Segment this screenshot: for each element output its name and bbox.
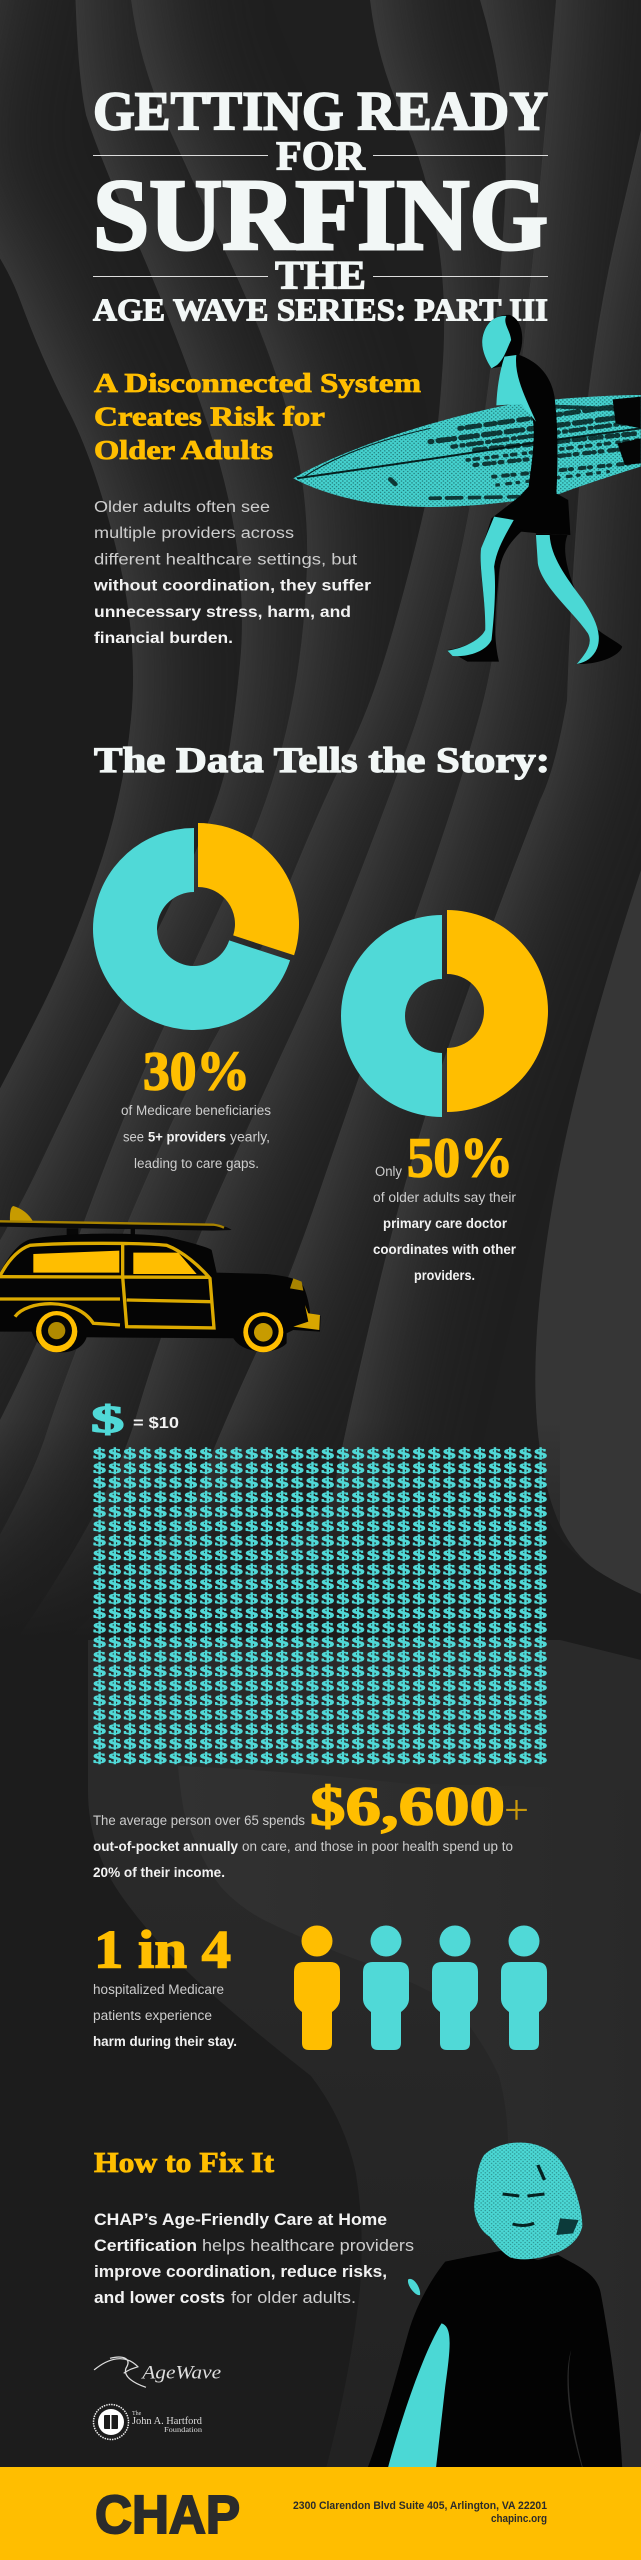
intro paragraph: different healthcare settings, but <box>94 552 358 568</box>
pictogram: 660 dollar signs: $$$$$$$$$$$$$$$$$$$$$$$$$$$$$$ <box>93 1475 549 1491</box>
heading: a disconnected system: A Disconnected System <box>94 368 422 398</box>
person 3 <box>432 1926 478 2050</box>
pictogram: 660 dollar signs: $$$$$$$$$$$$$$$$$$$$$$$$$$$$$$ <box>93 1605 549 1622</box>
stat: only 50 percent of older adults <box>373 1128 517 1283</box>
stat: 6,600 dollars out of pocket: out-of-pocket annually <box>93 1839 238 1854</box>
car body <box>0 1234 321 1352</box>
stat: 6,600 dollars out of pocket: The average person over 65 spends <box>93 1813 305 1828</box>
title block <box>93 80 548 328</box>
pictogram: 660 dollar signs: $$$$$$$$$$$$$$$$$$$$$$$$$$$$$$ <box>93 1721 549 1738</box>
heading: a disconnected system: Creates Risk for <box>94 402 325 432</box>
pictogram: 660 dollar signs: $$$$$$$$$$$$$$$$$$$$$$$$$$$$$$ <box>93 1692 549 1709</box>
stat: 30 percent of medicare beneficiaries: 30% <box>143 1040 250 1102</box>
person 2 <box>363 1926 409 2050</box>
pictogram: 660 dollar signs: $$$$$$$$$$$$$$$$$$$$$$$$$$$$$$ <box>93 1707 549 1723</box>
wheels <box>36 1311 283 1352</box>
windows <box>33 1251 197 1274</box>
fix paragraph: Certification <box>94 2236 197 2255</box>
illustration: surfer carrying a surfboard <box>293 315 641 664</box>
title block: SURFING <box>93 159 548 272</box>
pictogram: 660 dollar signs: $$$$$$$$$$$$$$$$$$$$$$$$$$$$$$ <box>93 1518 549 1535</box>
wood trim <box>0 1243 214 1328</box>
heading: a disconnected system: Older Adults <box>94 435 273 465</box>
stat: only 50 percent of older adults: providers. <box>414 1268 475 1283</box>
fix paragraph: improve coordination, reduce risks, <box>94 2262 387 2281</box>
stat: 1 in 4 hospitalized patients <box>93 1920 237 2049</box>
intro paragraph: without coordination, they suffer <box>93 578 371 594</box>
title block: AGE WAVE SERIES: PART III <box>93 292 548 328</box>
stat: only 50 percent of older adults: primary care doctor <box>383 1216 508 1231</box>
stat: 1 in 4 hospitalized patients: hospitalized Medicare <box>93 1982 224 1997</box>
pictogram: 660 dollar signs: $$$$$$$$$$$$$$$$$$$$$$$$$$$$$$ <box>93 1576 549 1593</box>
pictogram: 660 dollar signs: $$$$$$$$$$$$$$$$$$$$$$$$$$$$$$ <box>93 1504 549 1520</box>
intro paragraph: unnecessary stress, harm, and <box>94 604 351 621</box>
stat: 30 percent of medicare beneficiaries: leading to care gaps. <box>134 1156 259 1171</box>
surfboard strip <box>388 2279 450 2468</box>
stat: 6,600 dollars out of pocket: on care, and those in poor health spend up to <box>242 1839 513 1854</box>
heading: the data tells the story: The Data Tells the Story: <box>94 740 550 780</box>
person 4 <box>501 1926 547 2050</box>
stat: 30 percent of medicare beneficiaries: see <box>123 1130 144 1144</box>
illustration: woody station wagon with surfboard <box>0 1206 321 1352</box>
stat: 30 percent of medicare beneficiaries: yearly, <box>230 1130 270 1144</box>
contact details: chapinc.org <box>491 2513 547 2525</box>
pictogram: 660 dollar signs: $$$$$$$$$$$$$$$$$$$$$$$$$$$$$$ <box>93 1634 549 1651</box>
stat: only 50 percent of older adults: coordinates with other <box>373 1242 517 1257</box>
logo: john a. hartford foundation: The <box>132 2411 142 2417</box>
footer band <box>0 2467 641 2560</box>
pictogram: 660 dollar signs: $$$$$$$$$$$$$$$$$$$$$$$$$$$$$$ <box>93 1489 549 1506</box>
fix paragraph: CHAP’s Age-Friendly Care at Home <box>94 2210 387 2229</box>
stat: 30 percent of medicare beneficiaries: of Medicare beneficiaries <box>121 1103 271 1118</box>
pictogram: 660 dollar signs: $$$$$$$$$$$$$$$$$$$$$$$$$$$$$$ <box>93 1533 549 1549</box>
stat: 30 percent of medicare beneficiaries: 5+ providers <box>148 1130 226 1144</box>
title block: GETTING READY <box>93 80 548 142</box>
fix paragraph: and lower costs <box>94 2288 225 2307</box>
pictogram: 660 dollar signs: $$$$$$$$$$$$$$$$$$$$$$$$$$$$$$ <box>93 1591 549 1607</box>
stat: only 50 percent of older adults: Only <box>375 1164 402 1179</box>
legend: dollar sign equals 10 dollars <box>91 1398 179 1440</box>
donut chart: 30 percent <box>93 823 299 1030</box>
roof surfboard <box>0 1206 232 1238</box>
pictogram: 660 dollar signs: $$$$$$$$$$$$$$$$$$$$$$$$$$$$$$ <box>93 1562 549 1578</box>
fix paragraph: helps healthcare providers <box>202 2236 414 2255</box>
pictogram: 660 dollar signs <box>93 1446 549 1767</box>
stat: 1 in 4 hospitalized patients: patients experience <box>93 2008 212 2023</box>
title block: FOR <box>276 132 365 178</box>
logo: chap: CHAP <box>95 2485 240 2545</box>
surfer body <box>447 315 622 664</box>
pictogram: 660 dollar signs: $$$$$$$$$$$$$$$$$$$$$$$$$$$$$$ <box>93 1620 549 1636</box>
contact details <box>293 2500 547 2525</box>
person highlighted <box>294 1926 340 2050</box>
donut chart: 50 percent <box>341 910 548 1117</box>
intro paragraph: financial burden. <box>94 630 233 647</box>
stat: 30 percent of medicare beneficiaries <box>121 1040 271 1171</box>
stat: 6,600 dollars out of pocket: $6,600 <box>310 1776 505 1836</box>
stat: 6,600 dollars out of pocket <box>93 1776 529 1880</box>
legend: dollar sign equals 10 dollars: $ <box>91 1398 124 1440</box>
pictogram: 660 dollar signs: $$$$$$$$$$$$$$$$$$$$$$$$$$$$$$ <box>93 1678 549 1694</box>
stat: 6,600 dollars out of pocket: 20% of their income. <box>93 1865 225 1880</box>
pictogram: 660 dollar signs: $$$$$$$$$$$$$$$$$$$$$$$$$$$$$$ <box>93 1547 549 1564</box>
stat: 6,600 dollars out of pocket: + <box>504 1788 529 1834</box>
fix paragraph: for older adults. <box>231 2288 356 2307</box>
heading: a disconnected system <box>94 368 422 465</box>
contact details: 2300 Clarendon Blvd Suite 405, Arlington, VA 22201 <box>293 2500 547 2512</box>
logo: john a. hartford foundation: Foundation <box>164 2425 202 2434</box>
woman body silhouette <box>367 2250 622 2468</box>
intro paragraph: multiple providers across <box>94 525 294 542</box>
logo: john a. hartford foundation <box>94 2404 202 2440</box>
pictogram: 660 dollar signs: $$$$$$$$$$$$$$$$$$$$$$$$$$$$$$ <box>93 1750 549 1767</box>
stat: 1 in 4 hospitalized patients: 1 in 4 <box>94 1920 231 1980</box>
hair and face <box>474 2142 582 2259</box>
pictogram: 660 dollar signs: $$$$$$$$$$$$$$$$$$$$$$$$$$$$$$ <box>93 1446 549 1462</box>
pictogram: 660 dollar signs: $$$$$$$$$$$$$$$$$$$$$$$$$$$$$$ <box>93 1649 549 1665</box>
surfboard <box>293 395 641 507</box>
pictogram: four people, one highlighted <box>294 1926 547 2050</box>
illustration: smiling older woman holding a surfboard <box>367 2142 622 2468</box>
stat: only 50 percent of older adults: of older adults say their <box>373 1190 517 1205</box>
logo: age wave <box>94 2357 221 2387</box>
stat: only 50 percent of older adults: 50% <box>407 1128 513 1190</box>
logo: age wave: AgeWave <box>140 2362 221 2383</box>
heading: how to fix it: How to Fix It <box>94 2148 275 2179</box>
pictogram: 660 dollar signs: $$$$$$$$$$$$$$$$$$$$$$$$$$$$$$ <box>93 1663 549 1680</box>
stat: 1 in 4 hospitalized patients: harm during their stay. <box>93 2034 237 2049</box>
legend: dollar sign equals 10 dollars: = $10 <box>133 1415 179 1432</box>
title block: THE <box>275 252 366 298</box>
pictogram: 660 dollar signs: $$$$$$$$$$$$$$$$$$$$$$$$$$$$$$ <box>93 1736 549 1752</box>
fix paragraph <box>94 2210 414 2307</box>
logo: john a. hartford foundation: John A. Hartford <box>132 2415 202 2427</box>
pictogram: 660 dollar signs: $$$$$$$$$$$$$$$$$$$$$$$$$$$$$$ <box>93 1460 549 1477</box>
intro paragraph: Older adults often see <box>94 499 270 516</box>
intro paragraph <box>93 499 371 647</box>
